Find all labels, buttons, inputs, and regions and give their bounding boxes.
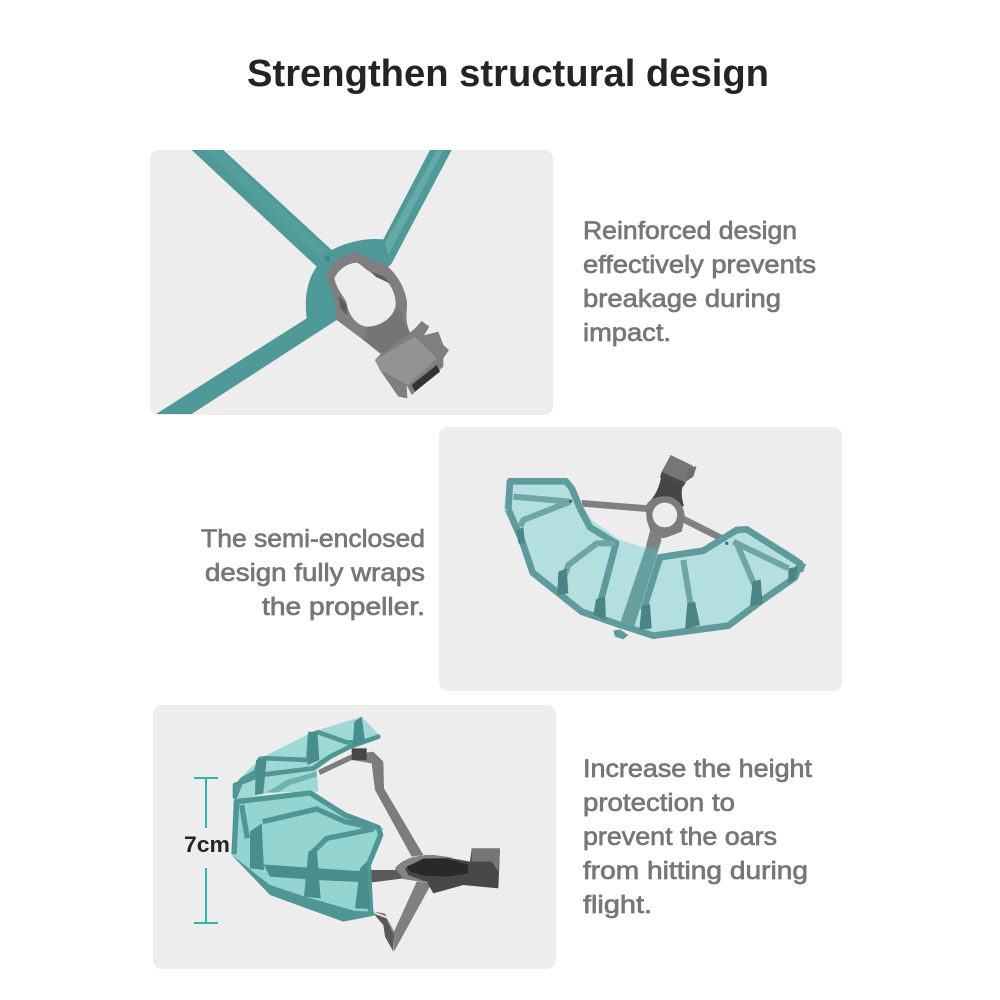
icon: 7cm dimension bracket — [194, 778, 218, 923]
text: reinforced design: Reinforced design — [583, 217, 797, 245]
icon: side view of guard — [232, 717, 500, 952]
panel: side view with height — [153, 705, 556, 969]
text: reinforced design — [583, 217, 816, 347]
icon: teal guard arms and hub — [156, 150, 452, 414]
title: Strengthen structural design — [247, 53, 769, 95]
text: reinforced design: breakage during — [583, 285, 781, 313]
text: reinforced design: impact. — [583, 319, 671, 347]
text: increase the height: flight. — [583, 891, 652, 919]
panel: semi-enclosed guard — [439, 427, 842, 691]
panel: top view of guard joint — [150, 150, 553, 415]
text: semi-enclosed design: the propeller. — [262, 593, 425, 621]
text: semi-enclosed design — [201, 525, 425, 621]
icon: semi-enclosed propeller guard — [504, 455, 806, 639]
text: increase the height: from hitting during — [583, 857, 808, 885]
text: increase the height: prevent the oars — [583, 823, 777, 851]
text: increase the height: protection to — [583, 789, 735, 817]
text: reinforced design: effectively prevents — [583, 251, 816, 279]
icon: grey clamp — [327, 252, 449, 398]
text: increase the height: Increase the height — [583, 755, 812, 783]
text: semi-enclosed design: design fully wraps — [205, 559, 425, 587]
text: semi-enclosed design: The semi-enclosed — [201, 525, 425, 553]
text: increase the height — [583, 755, 812, 919]
label: 7cm: 7cm — [184, 832, 230, 857]
